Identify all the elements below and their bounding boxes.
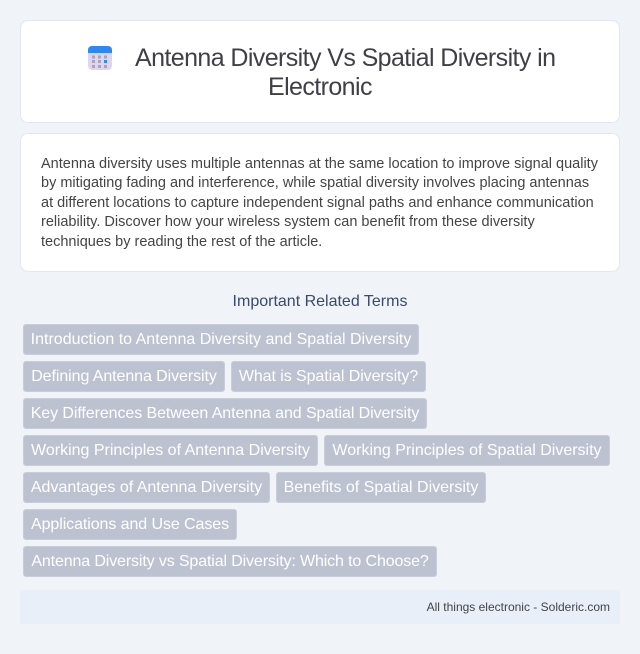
description text: reliability. Discover how your wireless system can benefit from these diversity	[41, 214, 535, 230]
panel: description	[20, 133, 620, 272]
title	[135, 44, 555, 101]
tag: Advantages of Antenna Diversity	[31, 479, 262, 496]
footer bar	[20, 590, 620, 624]
tag	[276, 472, 486, 503]
tag	[23, 472, 270, 503]
tag	[23, 435, 318, 466]
description text: techniques by reading the rest of the article.	[41, 234, 322, 250]
tag: Working Principles of Antenna Diversity	[31, 442, 310, 459]
header panel	[20, 20, 620, 123]
tag: Antenna Diversity vs Spatial Diversity: Which to Choose?	[31, 553, 429, 570]
title: Antenna Diversity Vs Spatial Diversity in	[135, 44, 555, 72]
tag: Applications and Use Cases	[31, 516, 229, 533]
tag list	[23, 324, 610, 577]
icon: calendar	[88, 46, 112, 70]
tag	[231, 361, 426, 392]
tag: Defining Antenna Diversity	[31, 368, 217, 385]
tag	[23, 324, 419, 355]
tag	[324, 435, 610, 466]
tag	[23, 361, 225, 392]
tag: Benefits of Spatial Diversity	[284, 479, 478, 496]
heading: important related terms: Important Related Terms	[233, 293, 407, 310]
description text	[41, 156, 598, 250]
description text: Antenna diversity uses multiple antennas at the same location to improve signal quality	[41, 156, 598, 172]
tag: Key Differences Between Antenna and Spatial Diversity	[31, 405, 419, 422]
tag	[23, 546, 437, 577]
tag	[23, 398, 427, 429]
description text: by mitigating fading and interference, while spatial diversity involves placing antennas	[41, 175, 589, 191]
tag: What is Spatial Diversity?	[239, 368, 418, 385]
tag: Working Principles of Spatial Diversity	[332, 442, 602, 459]
title: Electronic	[268, 73, 372, 101]
tag: Introduction to Antenna Diversity and Spatial Diversity	[31, 331, 411, 348]
tag	[23, 509, 237, 540]
description text: at different locations to capture independent signal paths and enhance communication	[41, 195, 594, 211]
footer text: All things electronic - Solderic.com	[427, 600, 610, 614]
